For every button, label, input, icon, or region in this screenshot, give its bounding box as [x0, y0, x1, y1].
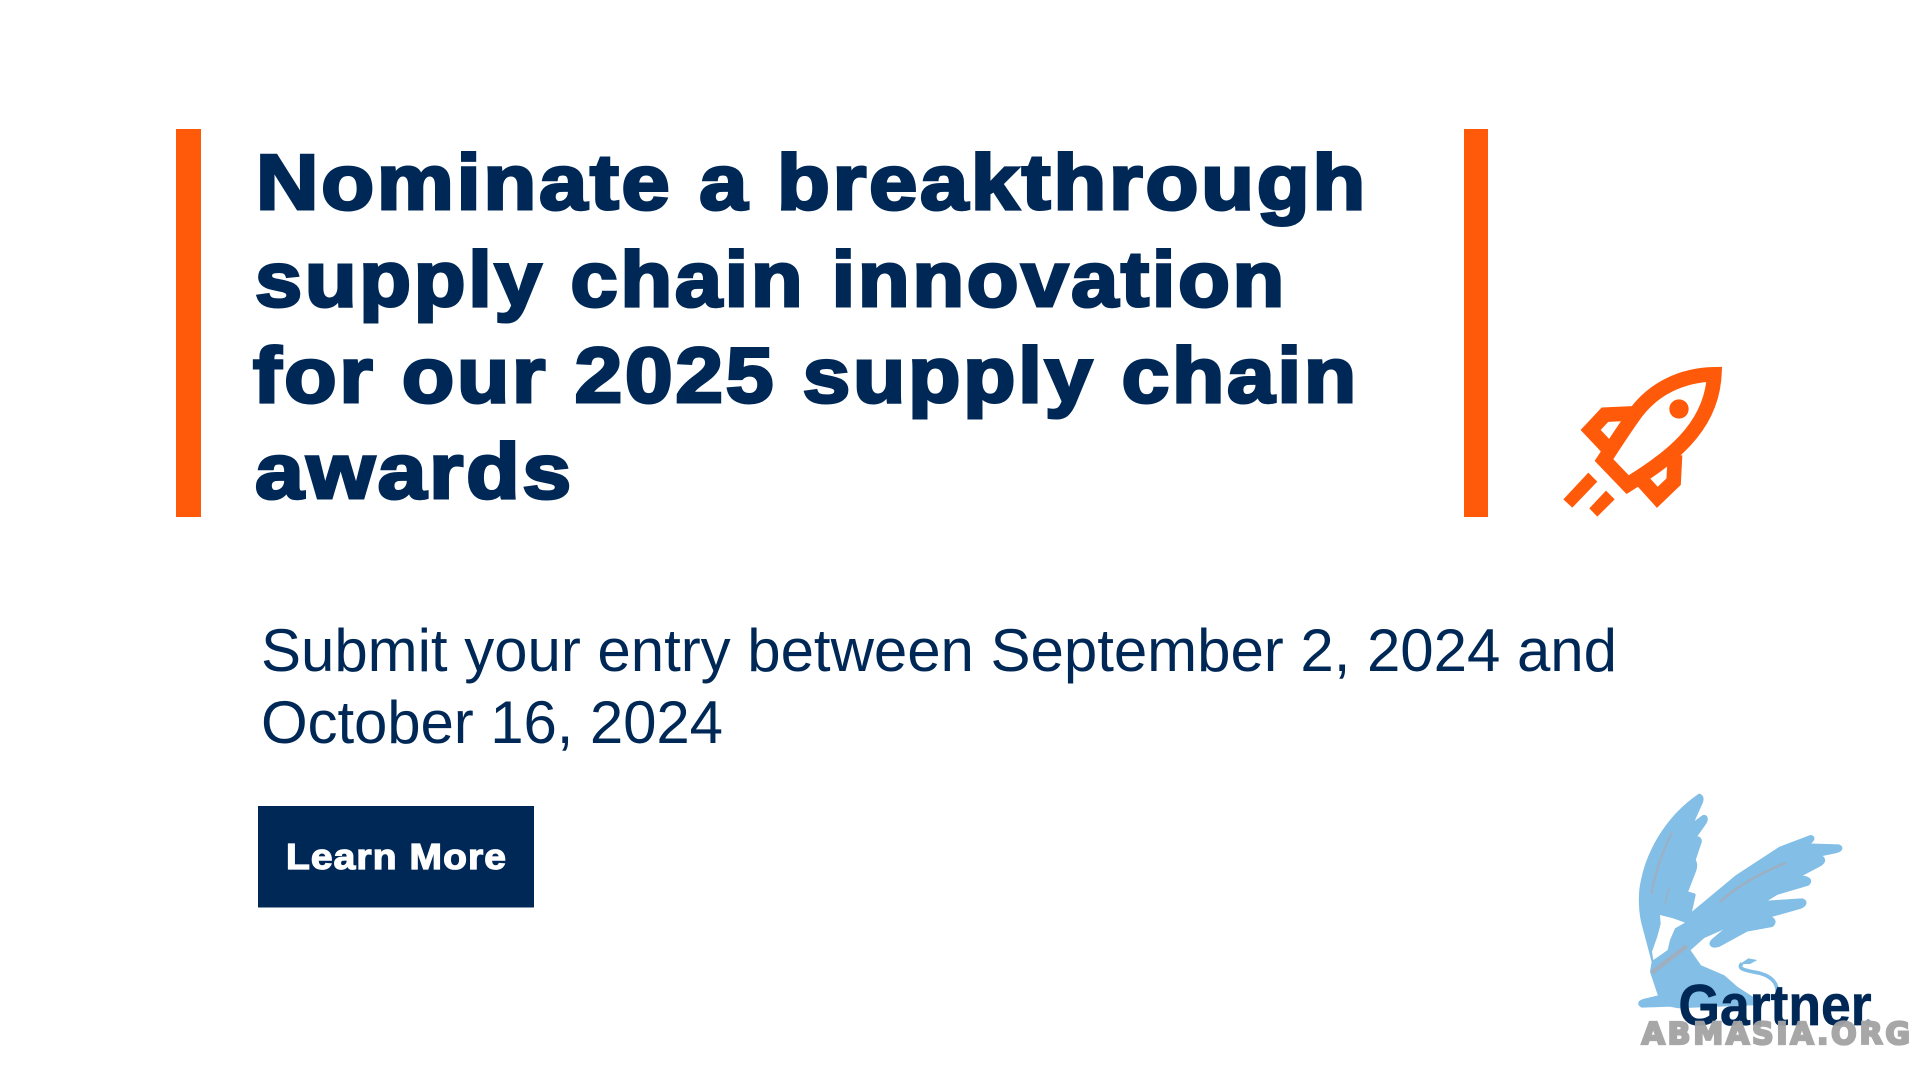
icon: rocket [1563, 374, 1714, 517]
title: awards [255, 427, 574, 515]
title: for our 2025 supply chain [253, 331, 1359, 419]
Learn More button [258, 806, 534, 908]
title: supply chain innovation [255, 235, 1287, 323]
submission dates text [261, 617, 1617, 756]
left orange accent bar [176, 129, 201, 517]
Learn More button: Learn More [286, 836, 507, 877]
watermark: ABMASIA.ORG [1642, 1017, 1910, 1052]
submission dates text: Submit your entry between September 2, 2024 and [261, 617, 1617, 684]
title: Nominate a breakthrough [256, 138, 1368, 226]
Gartner griffin logo [1640, 795, 1872, 1038]
submission dates text: October 16, 2024 [261, 689, 723, 756]
Gartner griffin logo: Gartner [1678, 974, 1872, 1038]
Gartner griffin logo: ® [1865, 1017, 1872, 1027]
title [253, 138, 1368, 515]
right orange accent bar [1464, 129, 1488, 517]
